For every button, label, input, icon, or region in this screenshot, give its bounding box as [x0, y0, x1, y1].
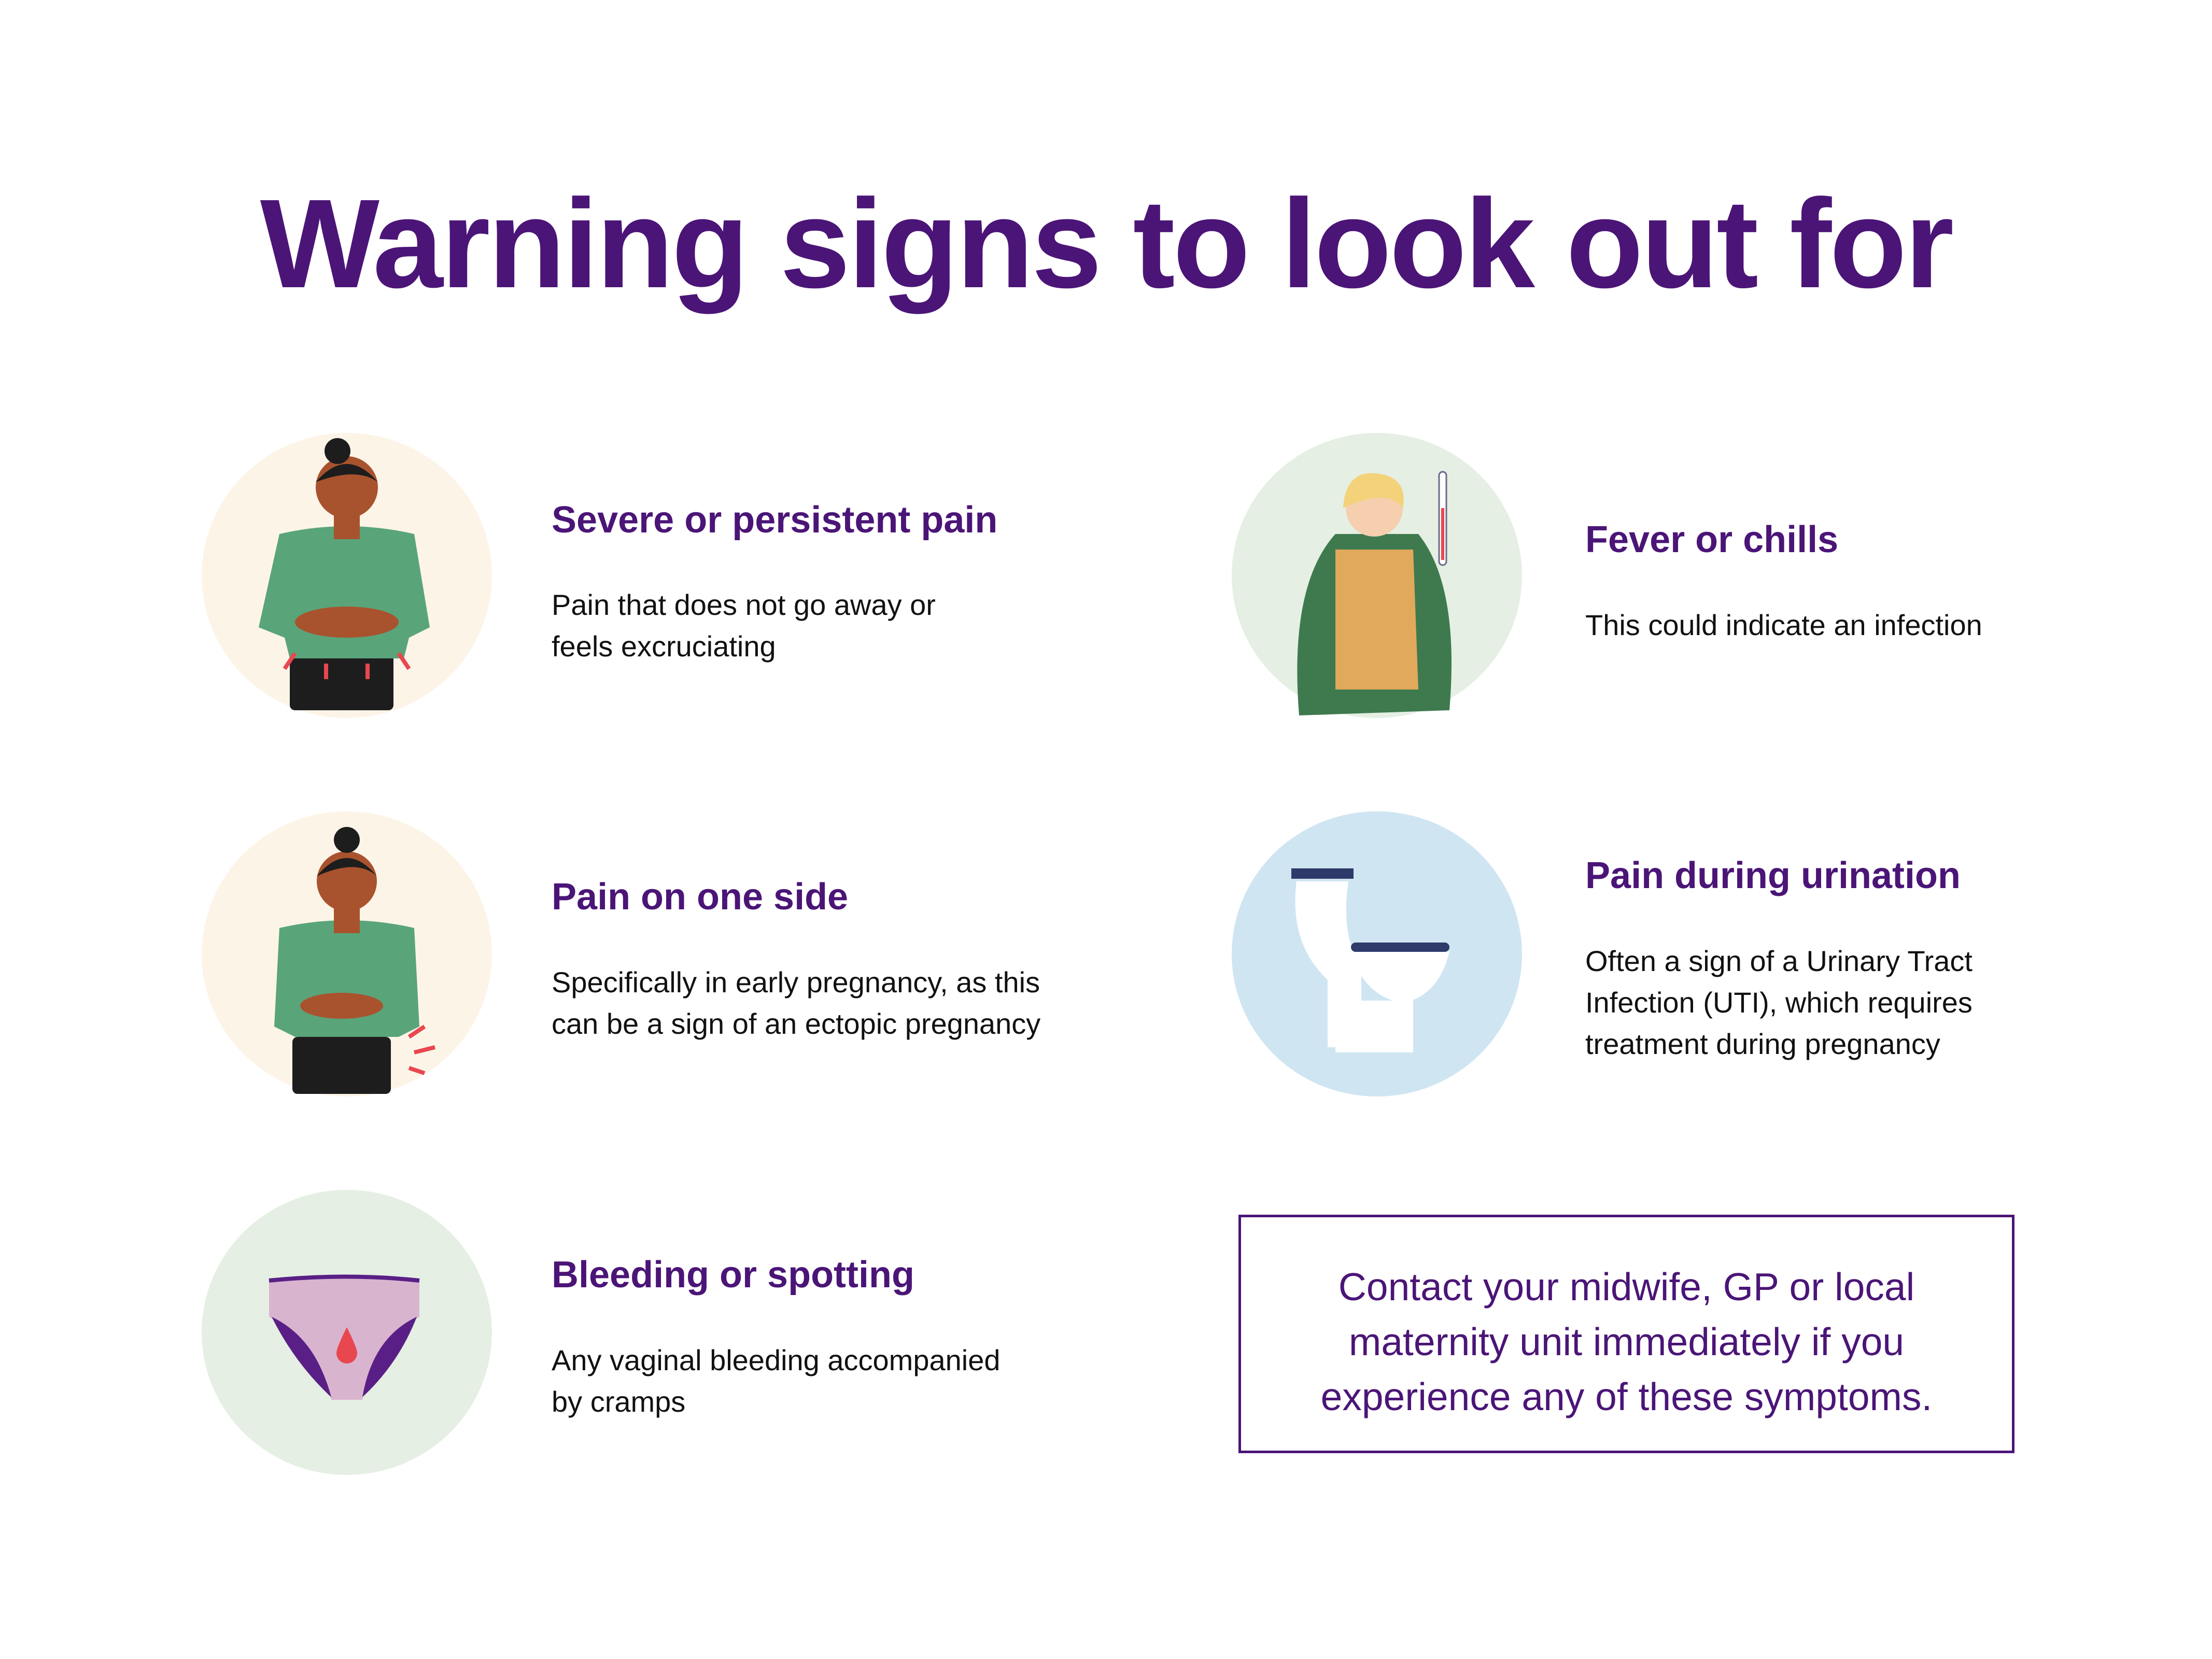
- icon: woman holding side: [202, 811, 492, 1096]
- body text: feels excruciating: [552, 630, 776, 663]
- panel: severe pain: [202, 433, 997, 718]
- panel: fever: [1232, 433, 1982, 718]
- body text: treatment during pregnancy: [1585, 1028, 1940, 1060]
- panel: bleeding: [202, 1190, 1000, 1475]
- callout: experience any of these symptoms.: [1321, 1375, 1932, 1418]
- body text: [1585, 945, 1973, 1060]
- heading: Pain on one side: [552, 876, 848, 918]
- body text: This could indicate an infection: [1585, 609, 1982, 641]
- heading: Fever or chills: [1585, 519, 1838, 560]
- title: Warning signs to look out for: [260, 173, 1952, 314]
- heading: Severe or persistent pain: [552, 499, 997, 541]
- panel: urination: [1232, 811, 1973, 1096]
- body text: can be a sign of an ectopic pregnancy: [552, 1007, 1040, 1040]
- icon: toilet: [1232, 811, 1522, 1096]
- icon: woman in blanket with thermometer: [1232, 433, 1522, 718]
- callout: maternity unit immediately if you: [1349, 1320, 1904, 1363]
- panel: pain on one side: [202, 811, 1041, 1096]
- body text: by cramps: [552, 1385, 685, 1418]
- body text: Any vaginal bleeding accompanied: [552, 1344, 1000, 1376]
- heading: Bleeding or spotting: [552, 1254, 914, 1296]
- icon: underwear with drop: [202, 1190, 492, 1475]
- heading: Pain during urination: [1585, 855, 1961, 896]
- icon: woman holding stomach: [202, 433, 492, 718]
- callout: [1238, 1215, 2014, 1453]
- body text: [552, 966, 1041, 1040]
- body text: Often a sign of a Urinary Tract: [1585, 945, 1973, 977]
- body text: Specifically in early pregnancy, as this: [552, 966, 1040, 999]
- body text: Infection (UTI), which requires: [1585, 986, 1973, 1019]
- body text: [552, 588, 936, 663]
- body text: [552, 1344, 1000, 1418]
- callout: Contact your midwife, GP or local: [1339, 1265, 1914, 1309]
- body text: Pain that does not go away or: [552, 588, 936, 621]
